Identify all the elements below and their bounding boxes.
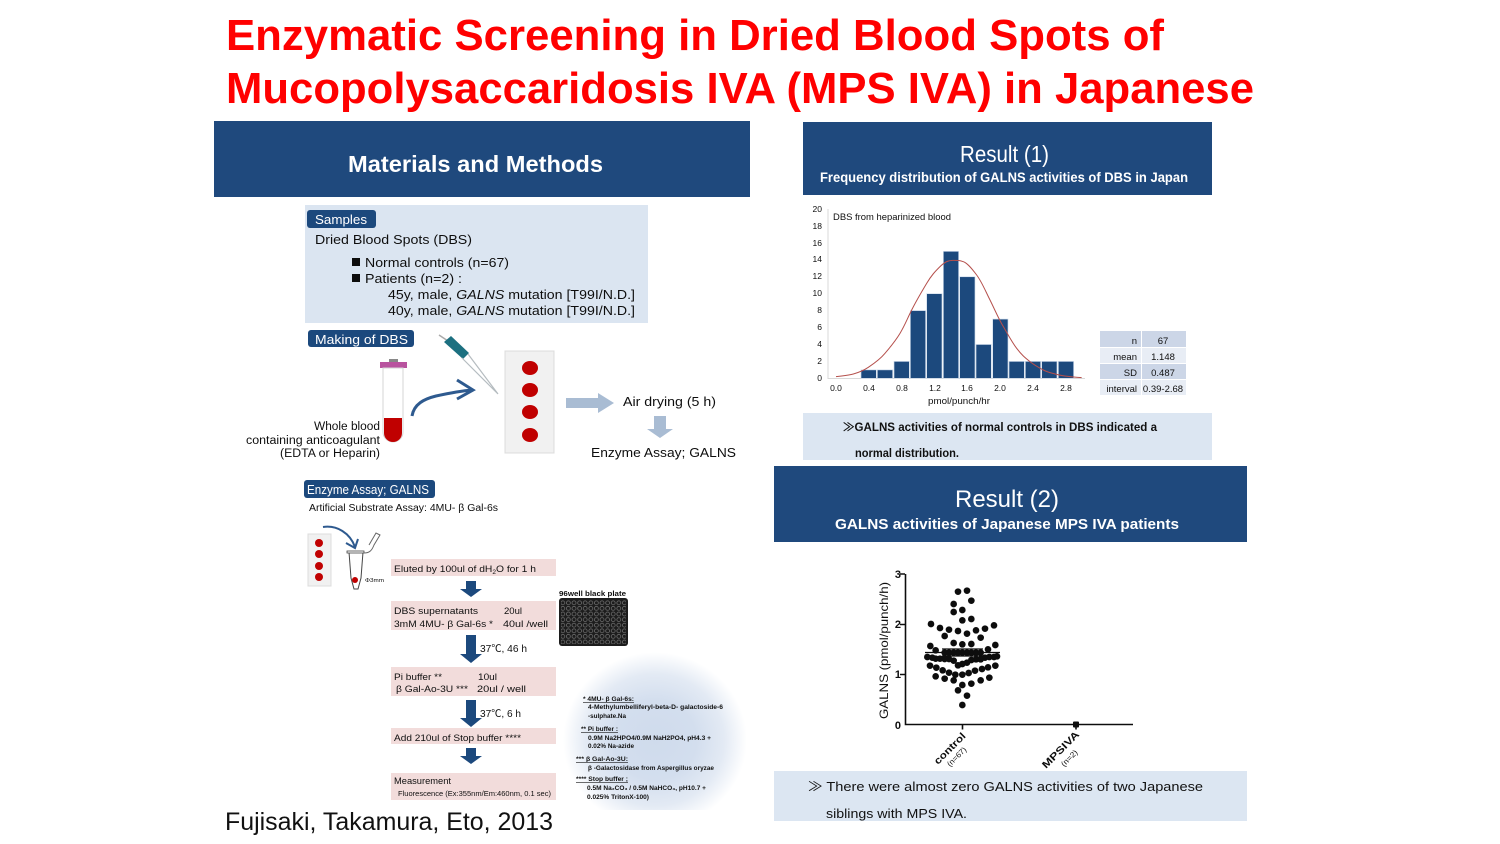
- step: measurement: Measurement: [394, 776, 452, 786]
- callout: result 2 conclusion: ≫ There were almost zero GALNS activities of two Japanese: [808, 779, 1203, 794]
- bars: [861, 251, 1074, 378]
- arrow: tube to card: [412, 380, 473, 416]
- panel: enzyme assay: [304, 480, 628, 800]
- footnote text: 0.025% TritonX-100): [587, 795, 649, 801]
- callout: result 1 conclusion: normal distribution.: [855, 446, 959, 460]
- category labels: control: [932, 731, 969, 767]
- samples text: 45y, male, GALNS mutation [T99I/N.D.]: [388, 287, 635, 302]
- step: Pi buffer: Pi buffer **: [394, 672, 442, 683]
- step: DBS supernatants: [391, 601, 556, 630]
- x axis labels: 1.2: [929, 383, 941, 393]
- footnote text: β -Galactosidase from Aspergillus oryzae: [588, 766, 715, 772]
- scatter chart: [877, 569, 1133, 771]
- samples text: 40y, male, GALNS mutation [T99I/N.D.]: [388, 303, 635, 318]
- stats table: interval: [1106, 384, 1137, 395]
- y axis labels: 10: [813, 288, 822, 298]
- y axis labels: 3: [895, 569, 901, 581]
- panel: materials and methods header: Materials and Methods: [348, 151, 603, 177]
- stats table: [1100, 331, 1186, 395]
- y axis labels: [813, 204, 822, 383]
- x axis labels: 0.4: [863, 383, 875, 393]
- y axis labels: 2: [895, 619, 901, 631]
- panel: result 2 header: Result (2): [955, 486, 1059, 513]
- arrow: step 2: [460, 635, 482, 663]
- x axis labels: 0.0: [830, 383, 842, 393]
- category labels: MPSIVA: [1040, 729, 1082, 771]
- whole blood label: [246, 421, 381, 460]
- icon: blood spot card: [505, 351, 554, 453]
- y axis labels: 8: [817, 305, 822, 315]
- stats table: 0.487: [1151, 368, 1175, 379]
- category labels: (n=2): [1059, 748, 1080, 768]
- icon: small card and tube: [308, 527, 384, 589]
- callout: result 2 conclusion: siblings with MPS IVA.: [826, 806, 967, 821]
- chart note: DBS from heparinized blood: [833, 212, 951, 223]
- panel: materials and methods header: [214, 121, 750, 197]
- footnotes panel: [570, 658, 740, 810]
- callout: result 1 conclusion: [803, 413, 1212, 460]
- y axis labels: [895, 569, 901, 732]
- x axis labels: [830, 383, 1072, 393]
- incubation 46 h: 37℃, 46 h: [480, 644, 527, 655]
- step: DBS supernatants: DBS supernatants: [394, 606, 478, 617]
- samples text: Dried Blood Spots (DBS): [315, 232, 472, 247]
- arrow: to enzyme assay: [647, 416, 673, 438]
- x axis title: pmol/punch/hr: [928, 396, 990, 407]
- axes: [900, 574, 1133, 730]
- y axis labels: 20: [813, 204, 822, 214]
- patient dots: [1073, 722, 1079, 728]
- stats table: mean: [1113, 352, 1137, 363]
- citation: Fujisaki, Takamura, Eto, 2013: [225, 808, 553, 836]
- making of DBS badge: Making of DBS: [315, 332, 408, 347]
- panel: result 1 header: [803, 122, 1212, 195]
- title: Enzymatic Screening in Dried Blood Spots of: [226, 11, 1164, 60]
- footnote text: 0.02% Na-azide: [588, 744, 635, 750]
- footnote text: [576, 697, 724, 801]
- footnote text: ** Pi buffer :: [581, 727, 618, 733]
- y axis title: GALNS (pmol/punch/h): [877, 582, 891, 719]
- axes: [828, 209, 1085, 378]
- step: DBS supernatants: 40ul /well: [503, 619, 548, 630]
- step: Pi buffer: 10ul: [478, 672, 497, 683]
- arrow: step 1: [460, 581, 482, 597]
- panel: result 1 header: Frequency distribution of GALNS activities of DBS in Japan: [820, 169, 1188, 185]
- callout: result 1 conclusion: ≫GALNS activities of normal controls in DBS indicated a: [843, 420, 1157, 434]
- y axis labels: 2: [817, 356, 822, 366]
- samples text: [315, 232, 635, 318]
- control dots: [924, 587, 1000, 708]
- title: Mucopolysaccaridosis IVA (MPS IVA) in Japanese: [226, 64, 1254, 113]
- x axis labels: 2.8: [1060, 383, 1072, 393]
- samples text: Normal controls (n=67): [365, 255, 509, 270]
- incubation 6 h: 37℃, 6 h: [480, 709, 521, 720]
- y axis labels: 14: [813, 254, 822, 264]
- stats table: SD: [1124, 368, 1137, 379]
- stats table: 1.148: [1151, 352, 1175, 363]
- step: stop buffer: Add 210ul of Stop buffer ****: [394, 733, 521, 744]
- y axis labels: 4: [817, 339, 822, 349]
- step: eluted: 2: [492, 570, 497, 576]
- whole blood label: Whole blood: [314, 421, 380, 433]
- whole blood label: (EDTA or Heparin): [280, 448, 380, 460]
- y axis labels: 0: [817, 373, 822, 383]
- step: Pi buffer: [391, 667, 556, 696]
- category labels: (n=67): [945, 745, 969, 768]
- panel: result 2 header: GALNS activities of Japanese MPS IVA patients: [835, 516, 1179, 533]
- x axis labels: 2.0: [994, 383, 1006, 393]
- x axis labels: 2.4: [1027, 383, 1039, 393]
- step: DBS supernatants: 20ul: [504, 606, 522, 617]
- panel: samples: [305, 205, 648, 323]
- icon: small card and tube: Φ3mm: [365, 578, 384, 584]
- footnote text: 0.5M Na₂CO₃ / 0.5M NaHCO₃, pH10.7 +: [587, 786, 707, 792]
- icon: 96 well plate: 96well black plate: [559, 589, 626, 598]
- category labels: [932, 729, 1082, 771]
- arrow: step 4: [460, 748, 482, 764]
- footnote text: 4-Methylumbelliferyl-beta-D- galactoside-6: [588, 705, 724, 711]
- footnote text: * 4MU- β Gal-6s:: [583, 697, 634, 703]
- air drying label: Air drying (5 h): [623, 394, 716, 409]
- panel: result 1 header: Result (1): [960, 141, 1049, 167]
- title: [226, 11, 1254, 113]
- panel: result 2 header: [774, 466, 1247, 542]
- step: Pi buffer: 20ul / well: [477, 684, 526, 695]
- footnote text: *** β Gal-Ao-3U:: [576, 757, 628, 763]
- y axis labels: 16: [813, 238, 822, 248]
- stats table: 67: [1158, 336, 1168, 347]
- y axis labels: 6: [817, 322, 822, 332]
- histogram chart: [813, 204, 1186, 407]
- samples badge: Samples: [315, 212, 368, 227]
- icon: pipette: [439, 335, 498, 394]
- footnote text: **** Stop buffer ;: [576, 777, 628, 783]
- step: measurement: [391, 773, 556, 800]
- x axis labels: 0.8: [896, 383, 908, 393]
- step: stop buffer: [391, 728, 556, 744]
- substrate text: Artificial Substrate Assay: 4MU- β Gal-6s: [309, 503, 498, 514]
- arrow: to air drying: [566, 393, 614, 413]
- arrow: step 3: [460, 700, 482, 727]
- step: measurement: Fluorescence (Ex:355nm/Em:460nm, 0.1 sec): [398, 789, 551, 798]
- step: DBS supernatants: 3mM 4MU- β Gal-6s *: [394, 619, 493, 630]
- footnote text: 0.9M Na2HPO4/0.9M NaH2PO4, pH4.3 +: [588, 736, 712, 742]
- step: eluted: [391, 559, 556, 576]
- enzyme assay badge: Enzyme Assay; GALNS: [307, 483, 429, 497]
- step: Pi buffer: β Gal-Ao-3U ***: [396, 684, 468, 695]
- y axis labels: 0: [895, 720, 901, 732]
- stats table: n: [1132, 336, 1137, 347]
- mean and error lines: [925, 649, 1000, 656]
- footnote text: -sulphate.Na: [588, 714, 627, 720]
- callout: result 2 conclusion: [774, 771, 1247, 821]
- panel: making of DBS: [246, 330, 736, 460]
- stats table: 0.39-2.68: [1143, 384, 1183, 395]
- y axis labels: 12: [813, 271, 822, 281]
- x axis labels: 1.6: [961, 383, 973, 393]
- samples text: Patients (n=2) :: [365, 271, 462, 286]
- icon: blood tube: [380, 359, 407, 442]
- step: eluted: O for 1 h: [496, 564, 536, 575]
- normal curve: [836, 260, 1082, 378]
- step: eluted: Eluted by 100ul of dH: [394, 564, 485, 575]
- y axis labels: 18: [813, 221, 822, 231]
- y axis labels: 1: [895, 669, 901, 681]
- whole blood label: containing anticoagulant: [246, 435, 381, 447]
- samples badge: [307, 210, 376, 228]
- icon: 96 well plate: [559, 589, 628, 646]
- enzyme assay label: Enzyme Assay; GALNS: [591, 445, 736, 460]
